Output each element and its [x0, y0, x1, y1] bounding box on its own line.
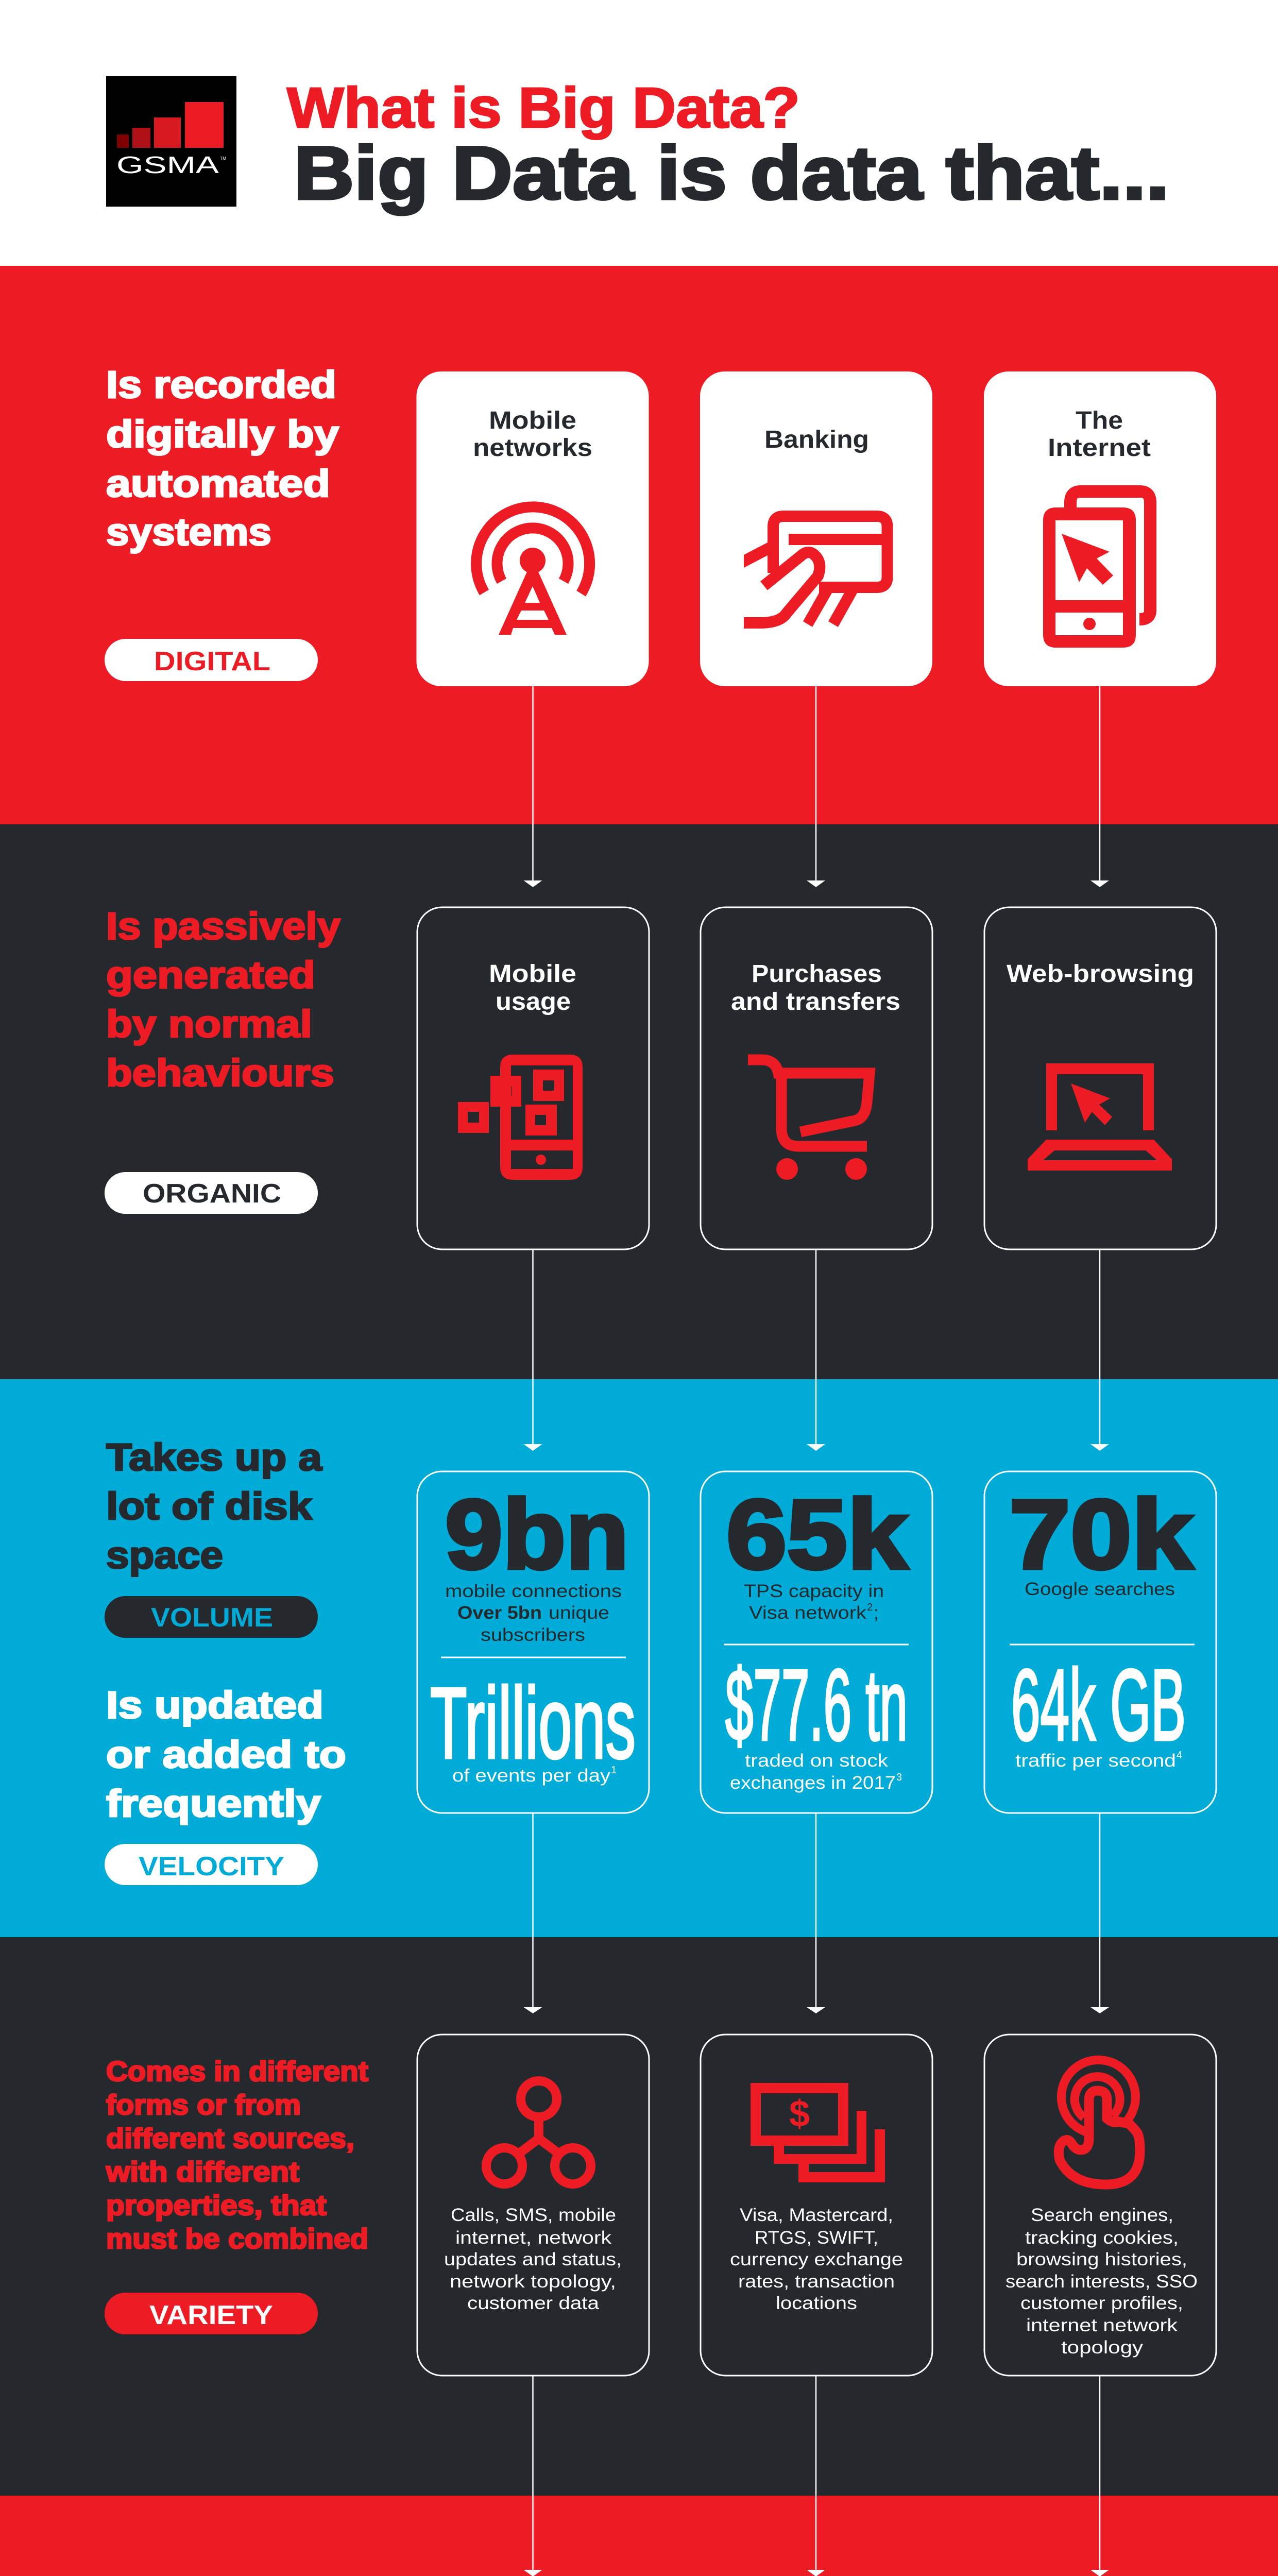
- card: internet stats: 70k: [1009, 1480, 1194, 1589]
- card: internet variety: topology: [1061, 2337, 1144, 2358]
- pill: digital: [105, 639, 318, 681]
- card: the internet: The: [1076, 407, 1123, 434]
- heading: comes in different forms: with different: [106, 2156, 299, 2188]
- icon: hand with card: [744, 516, 887, 627]
- card: banking stats: 2: [867, 1602, 873, 1613]
- pill: velocity: VELOCITY: [139, 1852, 284, 1882]
- card: banking stats: 3: [896, 1772, 902, 1783]
- heading: is passively generated: Is passively: [106, 905, 340, 947]
- card: mobile stats: mobile connections: [445, 1581, 622, 1601]
- pill: variety: VARIETY: [149, 2300, 273, 2330]
- card: mobile networks: [416, 371, 649, 686]
- GSMA logo: GSMA: [116, 151, 219, 178]
- heading: comes in different forms: Comes in different: [106, 2055, 368, 2087]
- card: banking variety: currency exchange: [730, 2249, 903, 2269]
- card: banking variety: rates, transaction: [738, 2272, 895, 2292]
- heading: takes up disk space: [106, 1436, 322, 1577]
- heading: is passively generated: generated: [106, 954, 315, 996]
- card: banking variety: locations: [776, 2293, 857, 2313]
- card: mobile stats: subscribers: [481, 1625, 585, 1645]
- icon: network nodes: [486, 2081, 591, 2184]
- card: mobile variety: updates and status,: [444, 2249, 622, 2269]
- heading: comes in different forms: different sources,: [106, 2122, 354, 2154]
- heading: comes in different forms: properties, that: [106, 2189, 327, 2221]
- card: internet stats: Google searches: [1025, 1579, 1175, 1599]
- pill: velocity: [105, 1844, 318, 1885]
- card: banking variety: Visa, Mastercard,: [740, 2205, 893, 2225]
- card: internet variety: tracking cookies,: [1025, 2228, 1179, 2248]
- icon: phone with apps: [458, 1055, 583, 1180]
- card: internet variety: [984, 2035, 1216, 2376]
- panel: volume and velocity: [0, 1379, 1278, 1937]
- card: mobile networks: Mobile: [489, 407, 576, 434]
- card: banking stats: 65k: [726, 1480, 908, 1589]
- card: mobile usage: usage: [496, 988, 571, 1015]
- card: internet variety: internet network: [1026, 2315, 1178, 2335]
- heading: is passively generated: behaviours: [106, 1052, 334, 1094]
- card: mobile stats: Over 5bn: [457, 1603, 542, 1623]
- heading: is recorded digitally: systems: [106, 511, 271, 553]
- heading: is recorded digitally: automated: [106, 462, 330, 505]
- card: banking stats: TPS capacity in: [744, 1581, 884, 1601]
- subtitle: Big Data is data that...: [294, 131, 1169, 215]
- card: purchases and transfers: [701, 907, 932, 1249]
- panel: header: [0, 0, 1278, 266]
- heading: comes in different forms: [106, 2055, 368, 2255]
- card: mobile stats: [417, 1471, 649, 1813]
- card: purchases and transfers: Purchases: [752, 960, 882, 988]
- card: mobile stats: of events per day: [452, 1766, 611, 1786]
- heading: is recorded digitally: Is recorded: [106, 363, 336, 406]
- card: internet stats: traffic per second: [1015, 1751, 1176, 1771]
- panel: variety: [0, 1937, 1278, 2496]
- icon: laptop with cursor: [1028, 1063, 1172, 1171]
- pill: digital: DIGITAL: [154, 647, 270, 676]
- card: mobile variety: internet, network: [455, 2228, 612, 2248]
- pill: volume: [105, 1596, 318, 1638]
- card: mobile stats: Trillions: [430, 1667, 636, 1780]
- card: internet stats: 4: [1177, 1750, 1182, 1761]
- heading: takes up disk space: Takes up a: [106, 1436, 322, 1479]
- pill: organic: [105, 1172, 318, 1214]
- card: banking stats: ;: [874, 1603, 879, 1623]
- heading: is updated frequently: [106, 1684, 346, 1825]
- heading: is updated frequently: Is updated: [106, 1684, 323, 1726]
- card: mobile stats: 9bn: [445, 1480, 629, 1589]
- heading: is recorded digitally: digitally by: [106, 413, 339, 455]
- icon: touch finger: [1059, 2060, 1140, 2184]
- heading: is recorded digitally: [106, 363, 339, 553]
- card: mobile variety: customer data: [467, 2293, 600, 2313]
- card: internet variety: search interests, SSO: [1006, 2272, 1198, 2292]
- card: mobile stats: 1: [611, 1765, 617, 1776]
- card: banking stats: traded on stock: [745, 1751, 889, 1771]
- heading: is updated frequently: or added to: [106, 1733, 346, 1776]
- pill: organic: ORGANIC: [143, 1179, 281, 1209]
- card: mobile variety: Calls, SMS, mobile: [451, 2205, 616, 2225]
- card: mobile variety: [417, 2035, 649, 2376]
- heading: comes in different forms: must be combined: [106, 2223, 368, 2255]
- heading: is passively generated: [106, 905, 340, 1094]
- heading: takes up disk space: lot of disk: [106, 1485, 313, 1528]
- card: internet variety: customer profiles,: [1020, 2293, 1183, 2313]
- icon: phones with cursor: [1043, 492, 1150, 648]
- card: internet variety: browsing histories,: [1016, 2249, 1187, 2269]
- pill: variety: [105, 2293, 318, 2334]
- card: banking stats: [701, 1471, 932, 1813]
- heading: is updated frequently: frequently: [106, 1782, 321, 1825]
- card: mobile stats: unique: [549, 1603, 609, 1623]
- pill: volume: VOLUME: [151, 1603, 273, 1633]
- card: purchases and transfers: and transfers: [731, 988, 900, 1015]
- heading: is passively generated: by normal: [106, 1003, 312, 1045]
- card: internet variety: Search engines,: [1031, 2205, 1173, 2225]
- panel: veracity: [0, 2496, 1278, 2576]
- card: internet stats: [984, 1471, 1216, 1813]
- panel: digital: [0, 266, 1278, 824]
- card: banking: Banking: [764, 426, 869, 453]
- card: banking variety: RTGS, SWIFT,: [755, 2228, 878, 2248]
- card: web-browsing: Web-browsing: [1007, 960, 1194, 988]
- title: What is Big Data?: [287, 76, 800, 140]
- panel: organic: [0, 824, 1278, 1379]
- heading: takes up disk space: space: [106, 1534, 223, 1577]
- card: banking: [700, 371, 932, 686]
- GSMA logo: TM: [220, 156, 226, 162]
- card: mobile variety: network topology,: [450, 2272, 616, 2292]
- card: the internet: [984, 371, 1216, 686]
- icon: antenna tower: [476, 507, 590, 635]
- card: banking variety: [701, 2035, 932, 2376]
- card: banking stats: Visa network: [749, 1603, 867, 1623]
- icon: stack of banknotes: $: [789, 2093, 810, 2134]
- icon: shopping cart: [748, 1060, 870, 1180]
- icon: stack of banknotes: [751, 2083, 885, 2182]
- connector arrows: [523, 686, 1109, 2576]
- card: the internet: Internet: [1048, 434, 1151, 462]
- GSMA logo: [106, 76, 236, 207]
- card: mobile networks: networks: [473, 434, 592, 462]
- card: mobile usage: Mobile: [489, 960, 576, 988]
- heading: comes in different forms: forms or from: [106, 2089, 301, 2121]
- card: web-browsing: [984, 907, 1216, 1249]
- card: banking stats: exchanges in 2017: [730, 1773, 896, 1793]
- card: banking stats: $77.6 tn: [725, 1649, 908, 1761]
- card: mobile usage: [417, 907, 649, 1249]
